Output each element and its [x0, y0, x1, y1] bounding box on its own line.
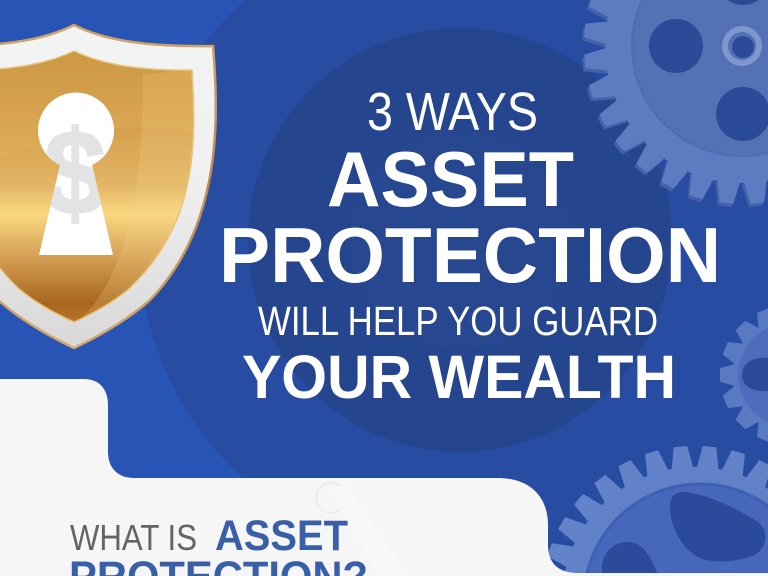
heading: what is asset protection — [69, 512, 368, 576]
keyhole — [38, 93, 114, 255]
title line: your wealth: YOUR WEALTH — [242, 343, 676, 411]
icon: right gear — [721, 307, 768, 443]
icon: top-right gear — [583, 0, 768, 206]
shield highlight — [80, 70, 194, 319]
icon: bottom gear — [547, 447, 768, 576]
shield gold face — [0, 51, 194, 322]
title line: will help you guard: WILL HELP YOU GUARD — [258, 298, 658, 344]
shield outer rim — [0, 25, 216, 348]
icon: shield with keyhole — [0, 25, 216, 348]
title line: protection: PROTECTION — [219, 211, 721, 299]
shield upper sheen — [57, 52, 92, 60]
icon: faint key watermark — [316, 483, 403, 576]
panel: white content area — [0, 379, 768, 576]
title line: asset: ASSET — [327, 135, 574, 223]
dollar sign: $ — [44, 106, 106, 240]
heading: what is asset protection: WHAT IS — [70, 517, 197, 558]
title line: 3 ways: 3 WAYS — [367, 82, 538, 142]
heading: what is asset protection: ASSET — [215, 512, 348, 560]
title — [219, 82, 721, 411]
